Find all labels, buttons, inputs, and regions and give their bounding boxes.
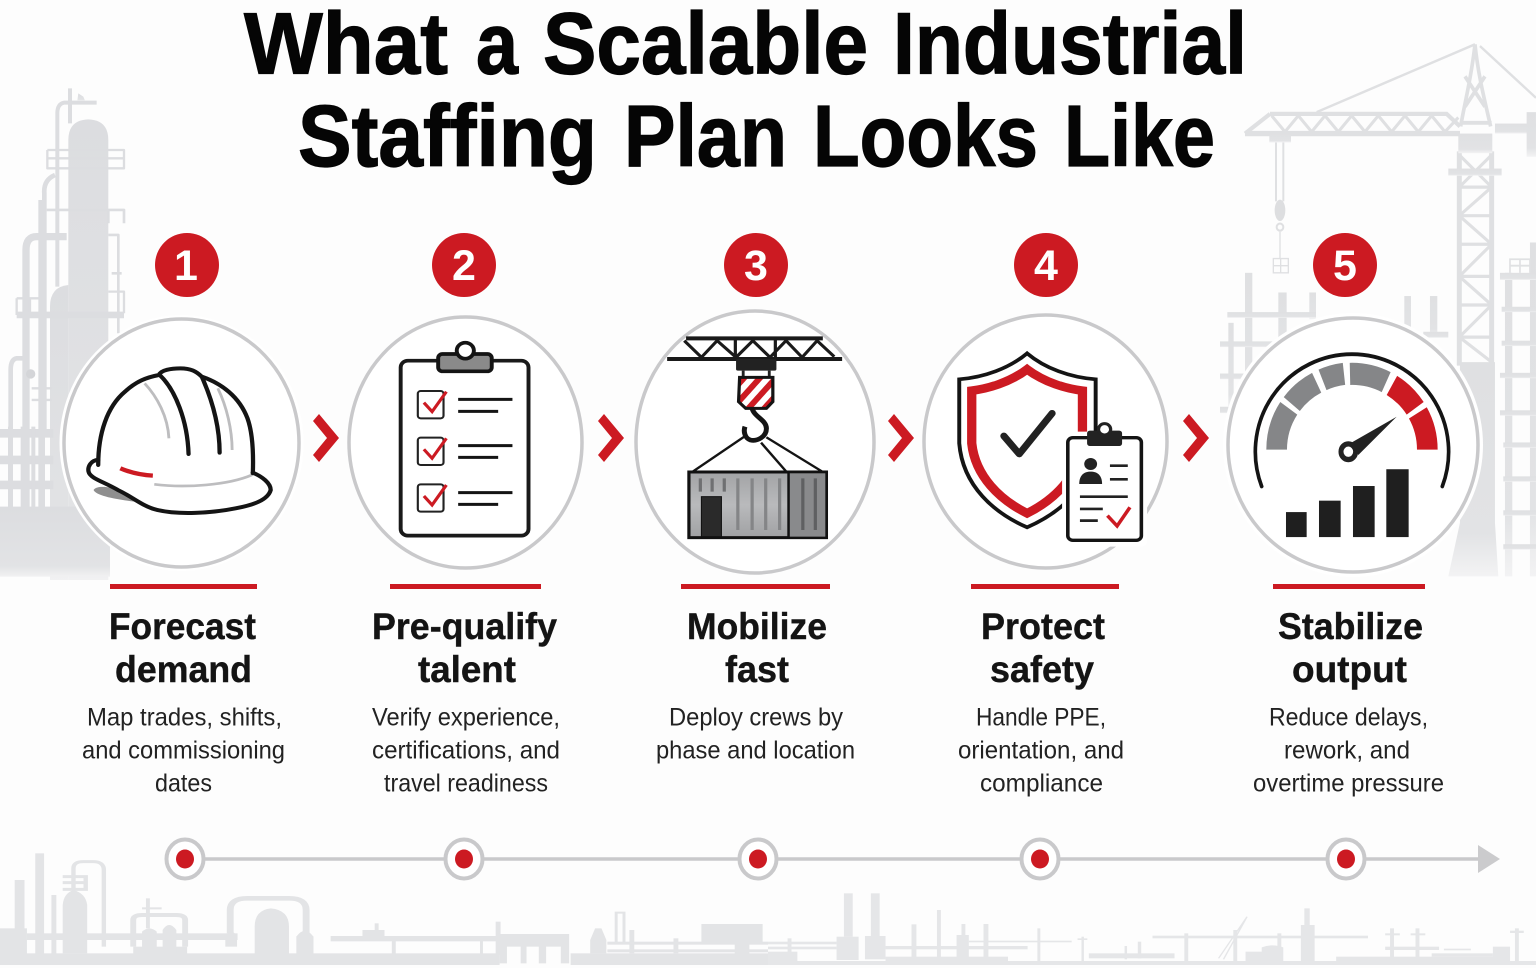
background: bottom skyline right	[768, 893, 1536, 965]
icon: gauge with bar chart in circle	[1223, 313, 1483, 577]
heading and description: Verify experience,	[372, 704, 560, 732]
heading and description: Handle PPE,	[976, 704, 1106, 732]
background: refinery silhouette left	[0, 88, 124, 580]
number badge 3: 3	[744, 242, 768, 290]
heading and description	[958, 584, 1124, 798]
heading and description	[656, 584, 855, 764]
arrow 3	[888, 414, 914, 462]
step 5: stabilize output	[1223, 233, 1483, 798]
heading and description: Forecast	[109, 606, 256, 647]
number badge 1	[155, 233, 219, 297]
arrow 4	[1183, 414, 1209, 462]
title	[244, 0, 1247, 185]
background: bottom skyline left	[0, 853, 768, 965]
heading and description: demand	[115, 649, 252, 690]
heading and description: compliance	[980, 770, 1103, 798]
title: Staffing	[298, 88, 597, 185]
icon: crane hook lifting container in circle	[636, 311, 874, 573]
icon: shield and clipboard in circle	[924, 315, 1167, 568]
number badge 4: 4	[1034, 242, 1058, 290]
title: Looks	[813, 88, 1038, 185]
heading and description: Map trades, shifts,	[87, 704, 282, 732]
number badge 3	[724, 233, 788, 297]
heading and description	[1253, 584, 1444, 798]
title: Plan	[624, 88, 787, 185]
number badge 5: 5	[1333, 242, 1357, 290]
heading and description: orientation, and	[958, 736, 1124, 764]
heading and description: travel readiness	[384, 770, 548, 798]
heading and description: talent	[418, 649, 516, 690]
step 2: pre-qualify talent	[349, 233, 582, 798]
icon: hard hat in circle	[60, 315, 304, 571]
step 4: protect safety	[924, 233, 1167, 798]
timeline arrow with step markers	[166, 840, 1500, 878]
step 3: mobilize fast	[636, 233, 874, 764]
heading and description	[82, 584, 285, 798]
arrow 2	[598, 414, 624, 462]
background: tower crane and scaffolding right	[1220, 44, 1536, 576]
heading and description: dates	[155, 770, 212, 798]
number badge 2: 2	[452, 242, 476, 290]
heading and description: Mobilize	[687, 606, 827, 647]
heading and description: and commissioning	[82, 736, 285, 764]
number badge 5	[1313, 233, 1377, 297]
icon: clipboard checklist in circle	[349, 317, 582, 568]
heading and description	[372, 584, 560, 798]
heading and description: certifications, and	[372, 736, 560, 764]
arrow 1	[313, 414, 339, 462]
heading and description: Protect	[981, 606, 1105, 647]
title: Like	[1064, 88, 1215, 185]
heading and description: fast	[725, 649, 789, 690]
step 1: forecast demand	[60, 233, 304, 798]
number badge 1: 1	[174, 242, 198, 290]
heading and description: Stabilize	[1278, 606, 1423, 647]
heading and description: Reduce delays,	[1269, 704, 1428, 732]
heading and description: overtime pressure	[1253, 770, 1444, 798]
heading and description: Pre-qualify	[372, 606, 557, 647]
number badge 2	[432, 233, 496, 297]
heading and description: output	[1292, 649, 1407, 690]
heading and description: safety	[990, 649, 1094, 690]
heading and description: phase and location	[656, 736, 855, 764]
heading and description: Deploy crews by	[669, 704, 843, 732]
number badge 4	[1014, 233, 1078, 297]
heading and description: rework, and	[1284, 736, 1410, 764]
